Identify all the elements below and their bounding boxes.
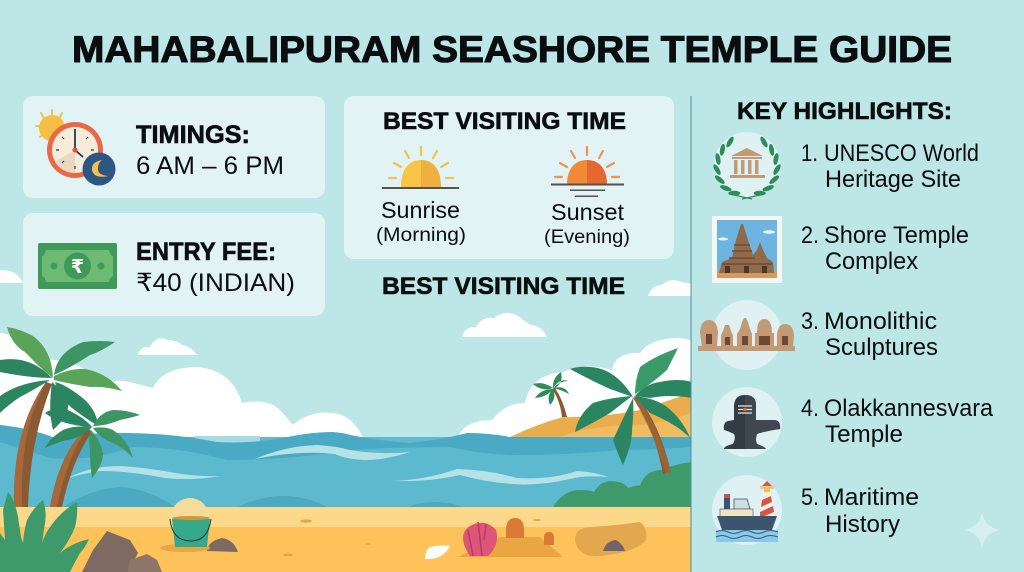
left bush <box>0 492 89 572</box>
heading: key highlights: KEY HIGHLIGHTS: <box>737 98 952 125</box>
highlight 1 icon: unesco laurel <box>712 132 782 199</box>
divider <box>690 96 692 572</box>
icon: clock with sun and moon <box>36 110 116 186</box>
sand bucket <box>160 498 211 552</box>
timings text: TIMINGS: <box>136 121 250 149</box>
repeated heading: BEST VISITING TIME <box>382 273 625 300</box>
right bush <box>553 462 691 507</box>
highlight 1 text <box>801 140 979 193</box>
sparkle star <box>964 512 1000 549</box>
highlight 3 text: Sculptures <box>825 334 938 361</box>
icon: rupee banknote: ₹ <box>71 257 84 278</box>
highlight 4 icon: shiva lingam <box>712 387 782 457</box>
beach scene illustration <box>0 270 692 572</box>
right palm <box>570 348 692 474</box>
title: MAHABALIPURAM SEASHORE TEMPLE GUIDE <box>72 29 952 70</box>
panel: best visiting time <box>344 96 674 259</box>
small clouds <box>0 270 691 355</box>
highlight 1 text: 1. <box>801 140 818 167</box>
sunrise label <box>376 197 466 246</box>
highlight 2 text: 2. <box>801 222 819 249</box>
sunset label <box>544 199 630 248</box>
highlight 1 text: UNESCO World <box>824 140 979 167</box>
sea <box>0 425 691 507</box>
panel heading: BEST VISITING TIME <box>383 108 626 135</box>
entry fee text: ENTRY FEE: <box>136 238 276 266</box>
highlight 4 text <box>801 395 994 448</box>
icon: sunset <box>551 147 624 197</box>
entry fee text <box>136 238 295 297</box>
highlight 5 text: Maritime <box>824 484 919 511</box>
sunset label: Sunset <box>551 199 625 225</box>
highlight 3 text: Monolithic <box>824 308 937 335</box>
sunset label: (Evening) <box>544 226 630 248</box>
island <box>510 393 691 437</box>
icon: rupee banknote <box>38 243 117 289</box>
highlight 5 text <box>801 484 919 538</box>
highlight 2 text: Complex <box>825 248 918 275</box>
highlight 2 icon: shore temple photo <box>712 216 782 283</box>
rocks <box>82 531 238 572</box>
sand <box>0 507 691 572</box>
highlight 5 text: History <box>825 511 900 538</box>
highlight 5 text: 5. <box>801 484 819 511</box>
sunrise label: (Morning) <box>376 224 466 246</box>
highlight 3 text: 3. <box>801 308 819 335</box>
highlight 5 icon: ship and lighthouse <box>712 475 782 545</box>
icon: sunrise <box>382 147 459 189</box>
highlight 3 icon: monolithic rathas <box>698 300 795 370</box>
highlight 4 text: Temple <box>825 421 903 448</box>
highlight 1 text: Heritage Site <box>825 166 961 193</box>
highlight 2 text: Shore Temple <box>824 222 969 249</box>
panel: timings <box>23 96 325 198</box>
left palm <box>0 327 140 507</box>
highlight 2 text <box>801 222 969 275</box>
highlight 4 text: 4. <box>801 395 819 422</box>
large clouds <box>0 333 691 445</box>
highlight 3 text <box>801 308 938 361</box>
panel: entry fee <box>23 213 325 316</box>
sand castle and shells <box>425 518 646 559</box>
entry fee text: ₹40 (INDIAN) <box>136 269 295 297</box>
timings text <box>136 121 284 180</box>
sunrise label: Sunrise <box>381 197 460 223</box>
wave highlights <box>68 445 608 484</box>
small palm <box>533 372 569 417</box>
timings text: 6 AM – 6 PM <box>136 152 284 180</box>
highlight 4 text: Olakkannesvara <box>824 395 994 422</box>
